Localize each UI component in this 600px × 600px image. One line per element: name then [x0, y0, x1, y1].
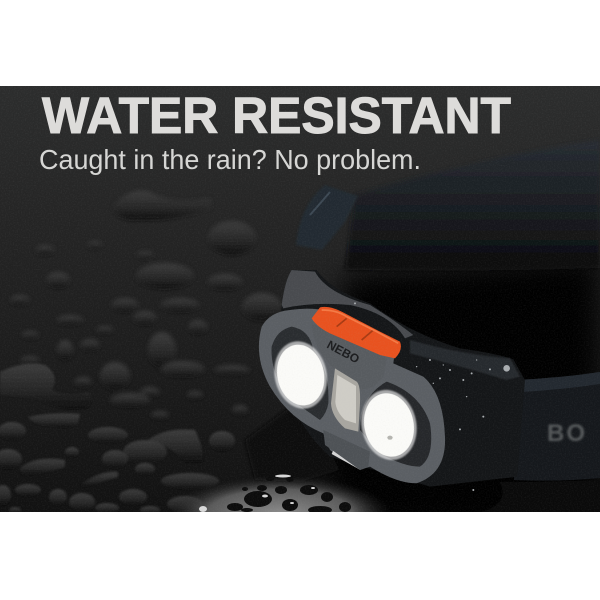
- subtitle: Caught in the rain? No problem.: [39, 144, 421, 175]
- strap logo: BO: [547, 420, 587, 447]
- orange button: [312, 307, 401, 358]
- reflective droplets: [227, 478, 351, 512]
- headband strap, upper loop: [345, 140, 600, 271]
- wet pool under lamp: [484, 481, 582, 512]
- lamp housing: [280, 270, 525, 487]
- housing grey top: [282, 270, 413, 338]
- left lens: [274, 340, 328, 410]
- housing sheen: [410, 340, 520, 380]
- center reflector: [331, 368, 360, 432]
- bottom clip: [332, 450, 362, 469]
- water droplets, mid field: [0, 364, 235, 514]
- blurred water droplets, far field: [10, 191, 282, 419]
- surface grain texture: [0, 86, 600, 512]
- background: wet black surface photo: [0, 86, 600, 552]
- headband strap, right side: [514, 372, 600, 481]
- bezel inner recess: [272, 327, 328, 420]
- headlamp: [259, 270, 525, 491]
- wet shiny patch near the lamp: [179, 480, 384, 512]
- brand mark: NEBO: [325, 338, 362, 366]
- water beads on housing: [354, 302, 510, 491]
- photo infographic canvas: [0, 86, 600, 512]
- bezel: [259, 309, 445, 483]
- center panel: [312, 323, 387, 390]
- right lens: [360, 389, 418, 461]
- title: WATER RESISTANT: [42, 87, 511, 144]
- dark shadow beside lamp base: [245, 409, 338, 478]
